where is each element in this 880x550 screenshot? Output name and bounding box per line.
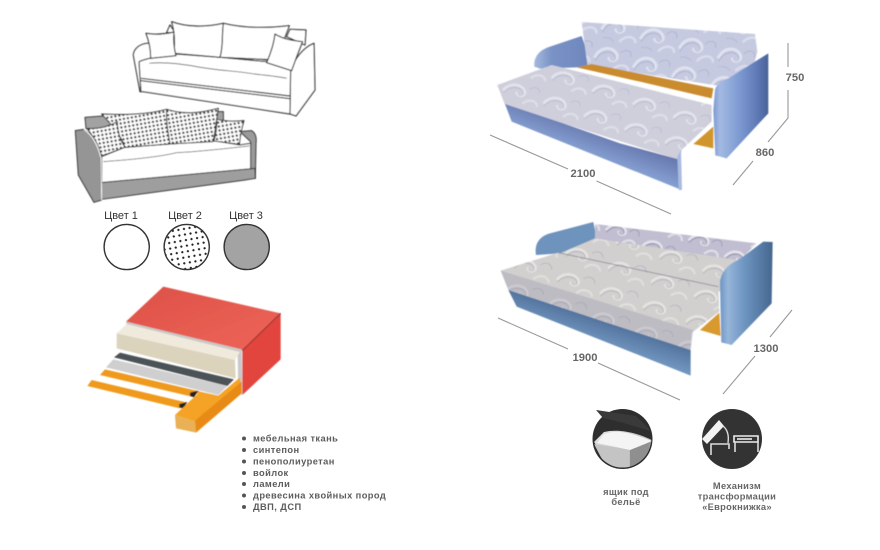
swatch: colour 1	[104, 224, 149, 270]
list text: войлок	[253, 468, 289, 478]
list text: ламели	[253, 479, 290, 489]
list text: ДВП, ДСП	[253, 502, 302, 512]
caption: storage box	[603, 487, 649, 507]
caption: transformation mechanism	[698, 481, 776, 512]
materials list	[242, 434, 386, 512]
list text: синтепон	[253, 445, 300, 455]
mattress cross-section	[87, 287, 281, 433]
swatch: colour 2	[164, 224, 209, 270]
colour swatches	[104, 210, 269, 270]
label 1300: 1300	[754, 343, 778, 355]
swatch label: colour 3: Цвет 3	[229, 210, 263, 222]
dimensions: second sofa	[498, 310, 792, 400]
shaded sofa with dotted cushions	[75, 108, 256, 202]
label 750: 750	[786, 72, 804, 84]
dimension lines	[490, 43, 788, 214]
list text: пенополиуретан	[253, 456, 335, 466]
icon: transformation mechanism	[702, 409, 762, 469]
caption: transformation mechanism: «Еврокнижка»	[702, 502, 772, 512]
dimension lines	[498, 310, 792, 400]
swatch: colour 3	[224, 224, 269, 270]
dimensions: first sofa	[490, 43, 804, 214]
list text: мебельная ткань	[253, 434, 338, 444]
label 1900: 1900	[573, 352, 597, 364]
label 2100: 2100	[571, 168, 595, 180]
caption: storage box: ящик под	[603, 487, 649, 497]
line-art sofa outline	[133, 22, 315, 116]
list text	[253, 434, 386, 512]
swatch label: colour 2: Цвет 2	[168, 210, 202, 222]
photo: sofa half-unfolded with storage box	[497, 22, 768, 190]
label 860: 860	[756, 147, 774, 159]
swatch label: colour 1: Цвет 1	[104, 210, 138, 222]
bullets	[242, 436, 246, 509]
icon: storage box	[592, 409, 652, 470]
caption: transformation mechanism: Механизм	[713, 481, 761, 491]
caption: storage box: бельё	[611, 497, 641, 507]
list text: древесина хвойных пород	[253, 490, 386, 500]
photo: sofa fully unfolded	[501, 222, 773, 376]
caption: transformation mechanism: трансформации	[698, 492, 776, 502]
